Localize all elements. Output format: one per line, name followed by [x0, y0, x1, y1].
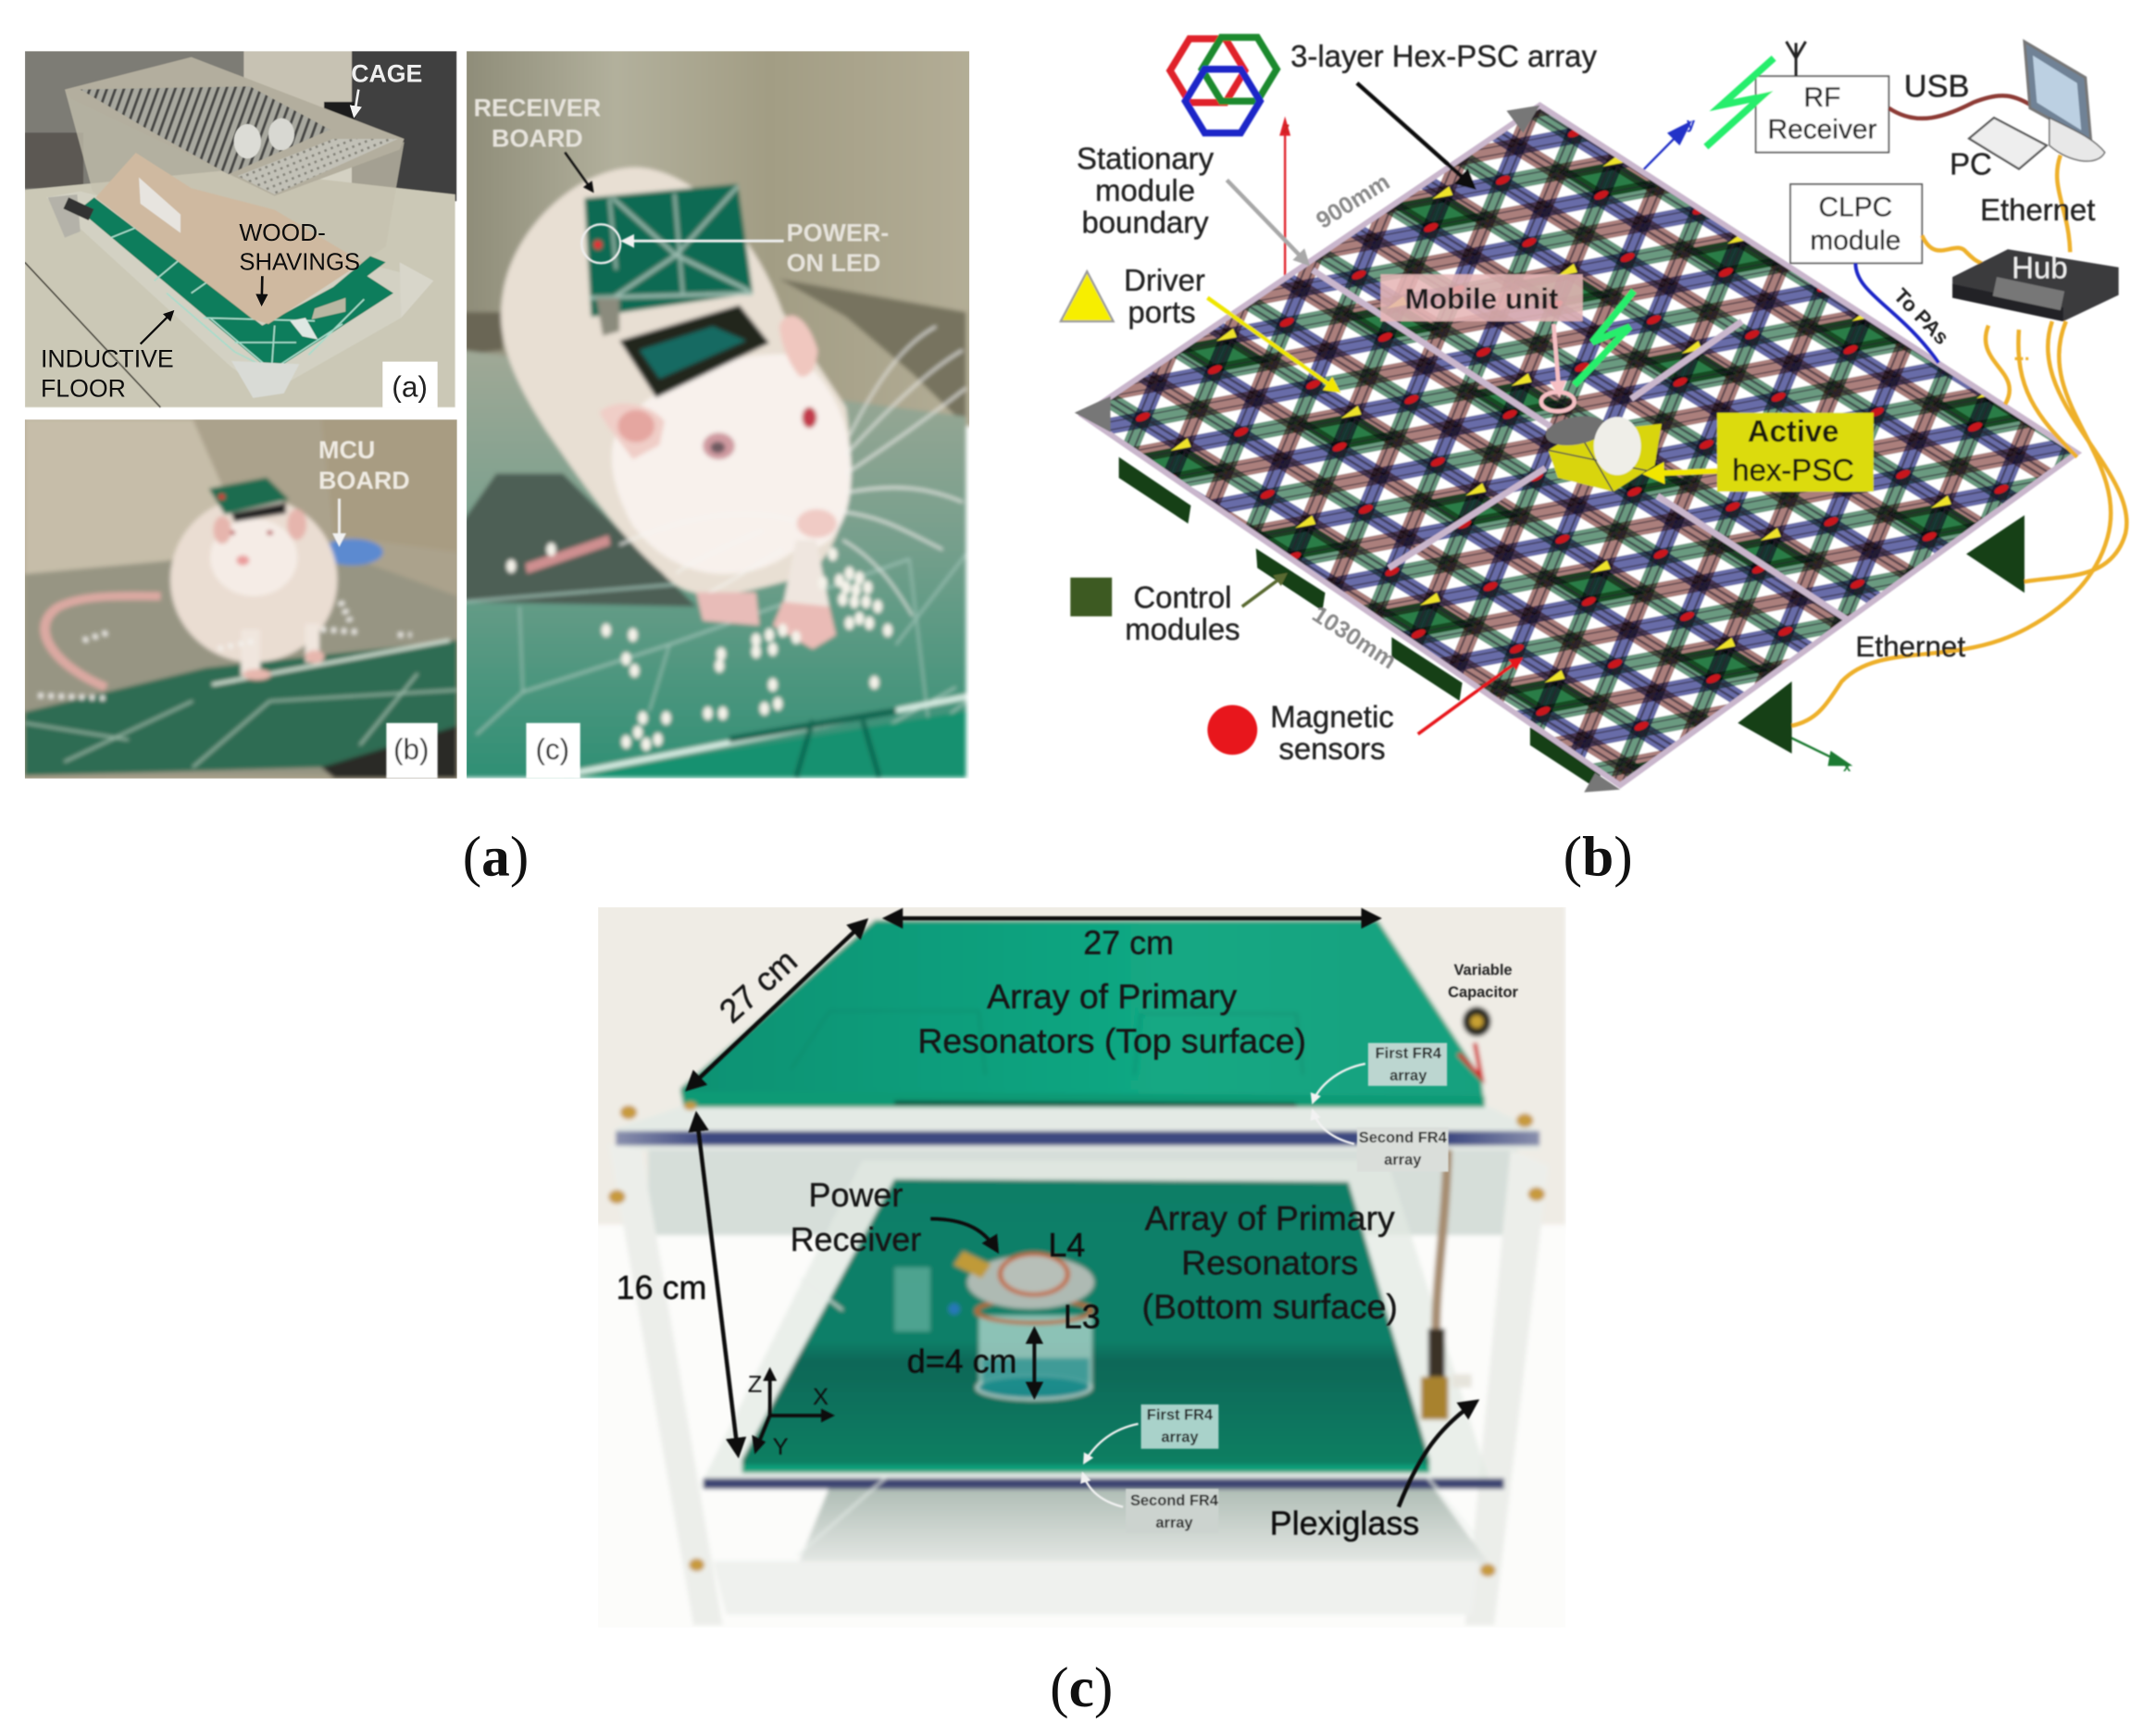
label: stationary module boundary: Stationary [1077, 142, 1214, 176]
label: L3: L3 [1064, 1299, 1101, 1336]
control modules along edges [1119, 457, 2025, 790]
label: receiver board: RECEIVER [474, 94, 601, 122]
label: mobile unit: Mobile unit [1405, 283, 1559, 316]
axis: y [1578, 116, 1696, 235]
label: power receiver: Power [809, 1177, 903, 1214]
label: power receiver: Receiver [791, 1221, 921, 1258]
label: stationary module boundary: boundary [1081, 205, 1209, 239]
dimension: 900mm: 900mm [1312, 169, 1394, 234]
Ethernet bundle from hub to modules [1792, 321, 2126, 726]
axes: XYZ: Z [748, 1371, 762, 1397]
label: wood-shavings: WOOD- [239, 218, 326, 246]
CLPC module box: CLPC [1819, 192, 1892, 222]
label: variable capacitor: Variable [1453, 962, 1513, 979]
photo b: rat with MCU board [19, 414, 463, 784]
caption (c): (c) [1050, 1656, 1113, 1719]
axis: x: x [1843, 759, 1851, 775]
label: top surface array: Resonators (Top surface) [917, 1021, 1306, 1060]
CLPC module box [1790, 184, 1922, 263]
dimension: 1030mm: 1030mm [1307, 601, 1401, 674]
legend: magnetic sensors: Magnetic [1270, 699, 1394, 733]
label: inductive floor: INDUCTIVE [41, 345, 174, 373]
dimension: top depth 27 cm: 27 cm [712, 943, 804, 1030]
legend: magnetic sensors [1207, 699, 1394, 766]
CLPC to hub cable [1922, 235, 1986, 266]
tag: (b): (b) [393, 733, 429, 766]
icon: hub [1952, 249, 2119, 321]
icon: antenna [1787, 42, 1806, 76]
legend: control modules [1070, 578, 1240, 646]
photo c: rat with receiver board [463, 46, 973, 779]
label: active hex-PSC: Active [1748, 414, 1838, 448]
array outline and module boundaries [1083, 106, 2077, 785]
RF receiver box: RF [1804, 82, 1840, 113]
label: to PAs: To PAs [1889, 284, 1953, 349]
icon: wireless bolt center [1575, 291, 1634, 385]
label: power-on LED: POWER- [787, 218, 889, 246]
label: bottom surface array: (Bottom surface) [1142, 1287, 1398, 1326]
legend: driver ports [1061, 263, 1205, 330]
CLPC module box: module [1810, 225, 1901, 256]
label: MCU board: MCU [318, 436, 375, 464]
label: Ethernet top: Ethernet [1980, 193, 2095, 227]
USB cable [1888, 95, 2036, 119]
caption (a): (a) [463, 825, 529, 888]
dimension: height 16 cm: 16 cm [617, 1269, 706, 1306]
ellipsis: ... [2013, 343, 2030, 365]
label: power-on LED: ON LED [787, 249, 880, 277]
label: bottom surface array: Resonators [1181, 1242, 1358, 1281]
label: wood-shavings: SHAVINGS [239, 250, 360, 276]
axis: z [1279, 117, 1290, 471]
to PAs cable [1855, 263, 1938, 363]
legend: driver ports: Driver [1124, 263, 1205, 297]
axis: x [1784, 734, 1852, 775]
RF receiver box: Receiver [1768, 115, 1877, 145]
label: PC: PC [1950, 146, 1992, 181]
tag: (c): (c) [536, 733, 569, 766]
callout: second FR4 array top: Second FR4 [1359, 1130, 1447, 1146]
axes: XYZ [748, 1367, 835, 1460]
label: L4: L4 [1048, 1227, 1085, 1264]
label: plexiglass: Plexiglass [1270, 1505, 1419, 1542]
label: cage: CAGE [351, 59, 422, 87]
icon: wireless bolt to receiver [1706, 58, 1774, 147]
legend: magnetic sensors: sensors [1278, 731, 1386, 766]
label: active hex-PSC: hex-PSC [1732, 453, 1854, 487]
panel b: hex-PSC array system diagram [1059, 33, 2130, 793]
axes: XYZ: X [813, 1384, 829, 1410]
dimension: d=4 cm: d=4 cm [907, 1343, 1016, 1380]
icon: three-layer hexagons [1170, 37, 1277, 133]
caption (b): (b) [1564, 825, 1633, 888]
photo a: cage on inductive floor [25, 50, 456, 408]
panel a: cage and rat photographs [19, 46, 973, 784]
label: active hex-PSC [1717, 413, 1874, 492]
label: bottom surface array: Array of Primary [1145, 1198, 1395, 1237]
label: receiver board: BOARD [492, 125, 583, 153]
gray corner arrows [1075, 106, 1620, 793]
RF receiver box [1756, 76, 1888, 153]
callout: first FR4 array bottom: array [1161, 1429, 1199, 1445]
Ethernet cable PC to hub [2057, 156, 2070, 252]
dimension: d=4 cm [907, 1330, 1034, 1396]
label: USB: USB [1904, 69, 1969, 105]
label: inductive floor: FLOOR [41, 374, 126, 402]
callout: second FR4 array bottom: array [1155, 1515, 1193, 1531]
icon: hub: Hub [2012, 251, 2068, 285]
axes: XYZ: Y [773, 1434, 789, 1460]
legend: driver ports: ports [1128, 295, 1196, 330]
callout: first FR4 array top [1368, 1043, 1447, 1086]
tag: (a): (a) [392, 369, 428, 403]
callout: second FR4 array top [1357, 1128, 1449, 1172]
label: Ethernet bottom: Ethernet [1855, 631, 1965, 663]
mobile unit rat [1541, 392, 1662, 492]
label: mobile unit [1380, 274, 1583, 321]
callout: first FR4 array top: array [1390, 1068, 1427, 1084]
heading: 3-layer Hex-PSC array: 3-layer Hex-PSC array [1290, 39, 1597, 73]
icon: PC monitor and keyboard [1969, 42, 2105, 169]
callout: second FR4 array top: array [1384, 1152, 1422, 1168]
axis: z: z [1282, 120, 1290, 137]
callout: first FR4 array top: First FR4 [1376, 1045, 1441, 1062]
label: MCU board: BOARD [318, 467, 410, 494]
callout: first FR4 array bottom [1141, 1405, 1218, 1449]
legend: control modules: Control [1133, 581, 1231, 615]
dimension: top width 27 cm: 27 cm [1083, 925, 1174, 962]
axis: y: y [1687, 116, 1696, 132]
label: top surface array: Array of Primary [987, 977, 1237, 1016]
marker: power-on LED circle [581, 224, 620, 263]
label: variable capacitor: Capacitor [1448, 984, 1519, 1001]
callout: first FR4 array bottom: First FR4 [1147, 1406, 1213, 1423]
panel c: resonator array photograph [593, 904, 1565, 1630]
dimension: height 16 cm [617, 1115, 738, 1455]
callout: second FR4 array bottom: Second FR4 [1130, 1492, 1218, 1509]
callout: second FR4 array bottom [1126, 1489, 1219, 1533]
hex-PSC coil array [1109, 107, 2072, 783]
photo backdrop and apparatus [593, 904, 1565, 1630]
legend: control modules: modules [1125, 612, 1240, 646]
label: stationary module boundary: module [1095, 173, 1195, 207]
dimension: top depth 27 cm [688, 921, 866, 1089]
